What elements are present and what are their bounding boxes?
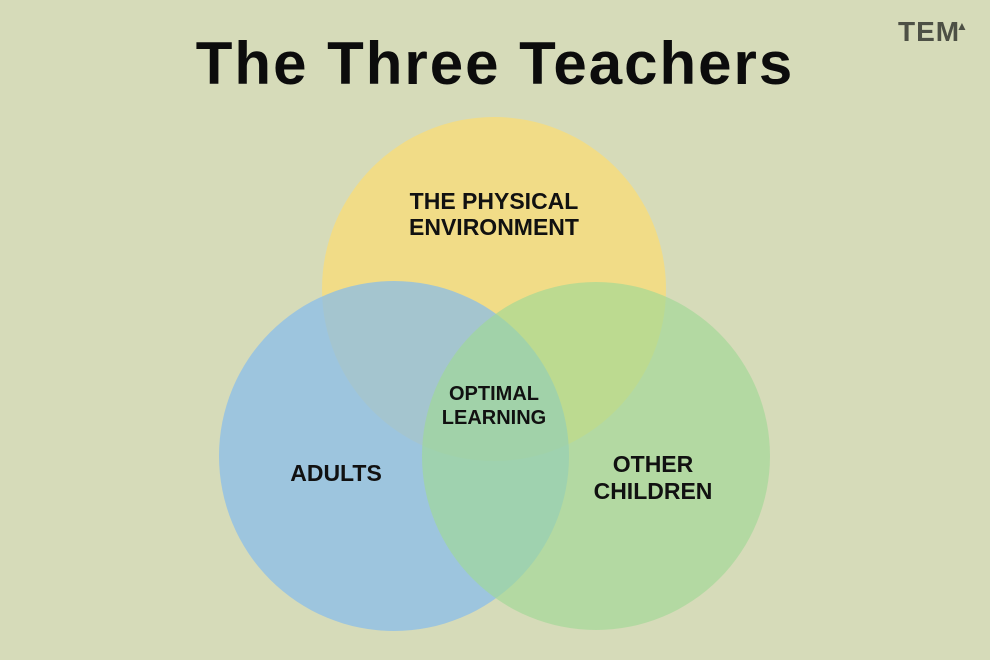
circle: adults <box>219 281 569 631</box>
label: physical environment: THE PHYSICAL <box>410 188 578 214</box>
title: The Three Teachers <box>196 30 794 97</box>
logo: TEM: ▲ <box>956 19 969 33</box>
circle: other children <box>422 282 770 630</box>
label: other children: CHILDREN <box>594 478 712 504</box>
label: physical environment: ENVIRONMENT <box>409 214 579 240</box>
label: other children: OTHER <box>613 451 694 477</box>
label: optimal learning: LEARNING <box>442 407 546 429</box>
label: other children <box>594 451 712 504</box>
label: adults: ADULTS <box>290 460 382 486</box>
circle: physical environment <box>322 117 666 461</box>
logo: TEM: TEM <box>898 16 960 47</box>
label: physical environment <box>409 188 579 240</box>
label: optimal learning <box>442 383 546 429</box>
label: optimal learning: OPTIMAL <box>449 383 539 405</box>
